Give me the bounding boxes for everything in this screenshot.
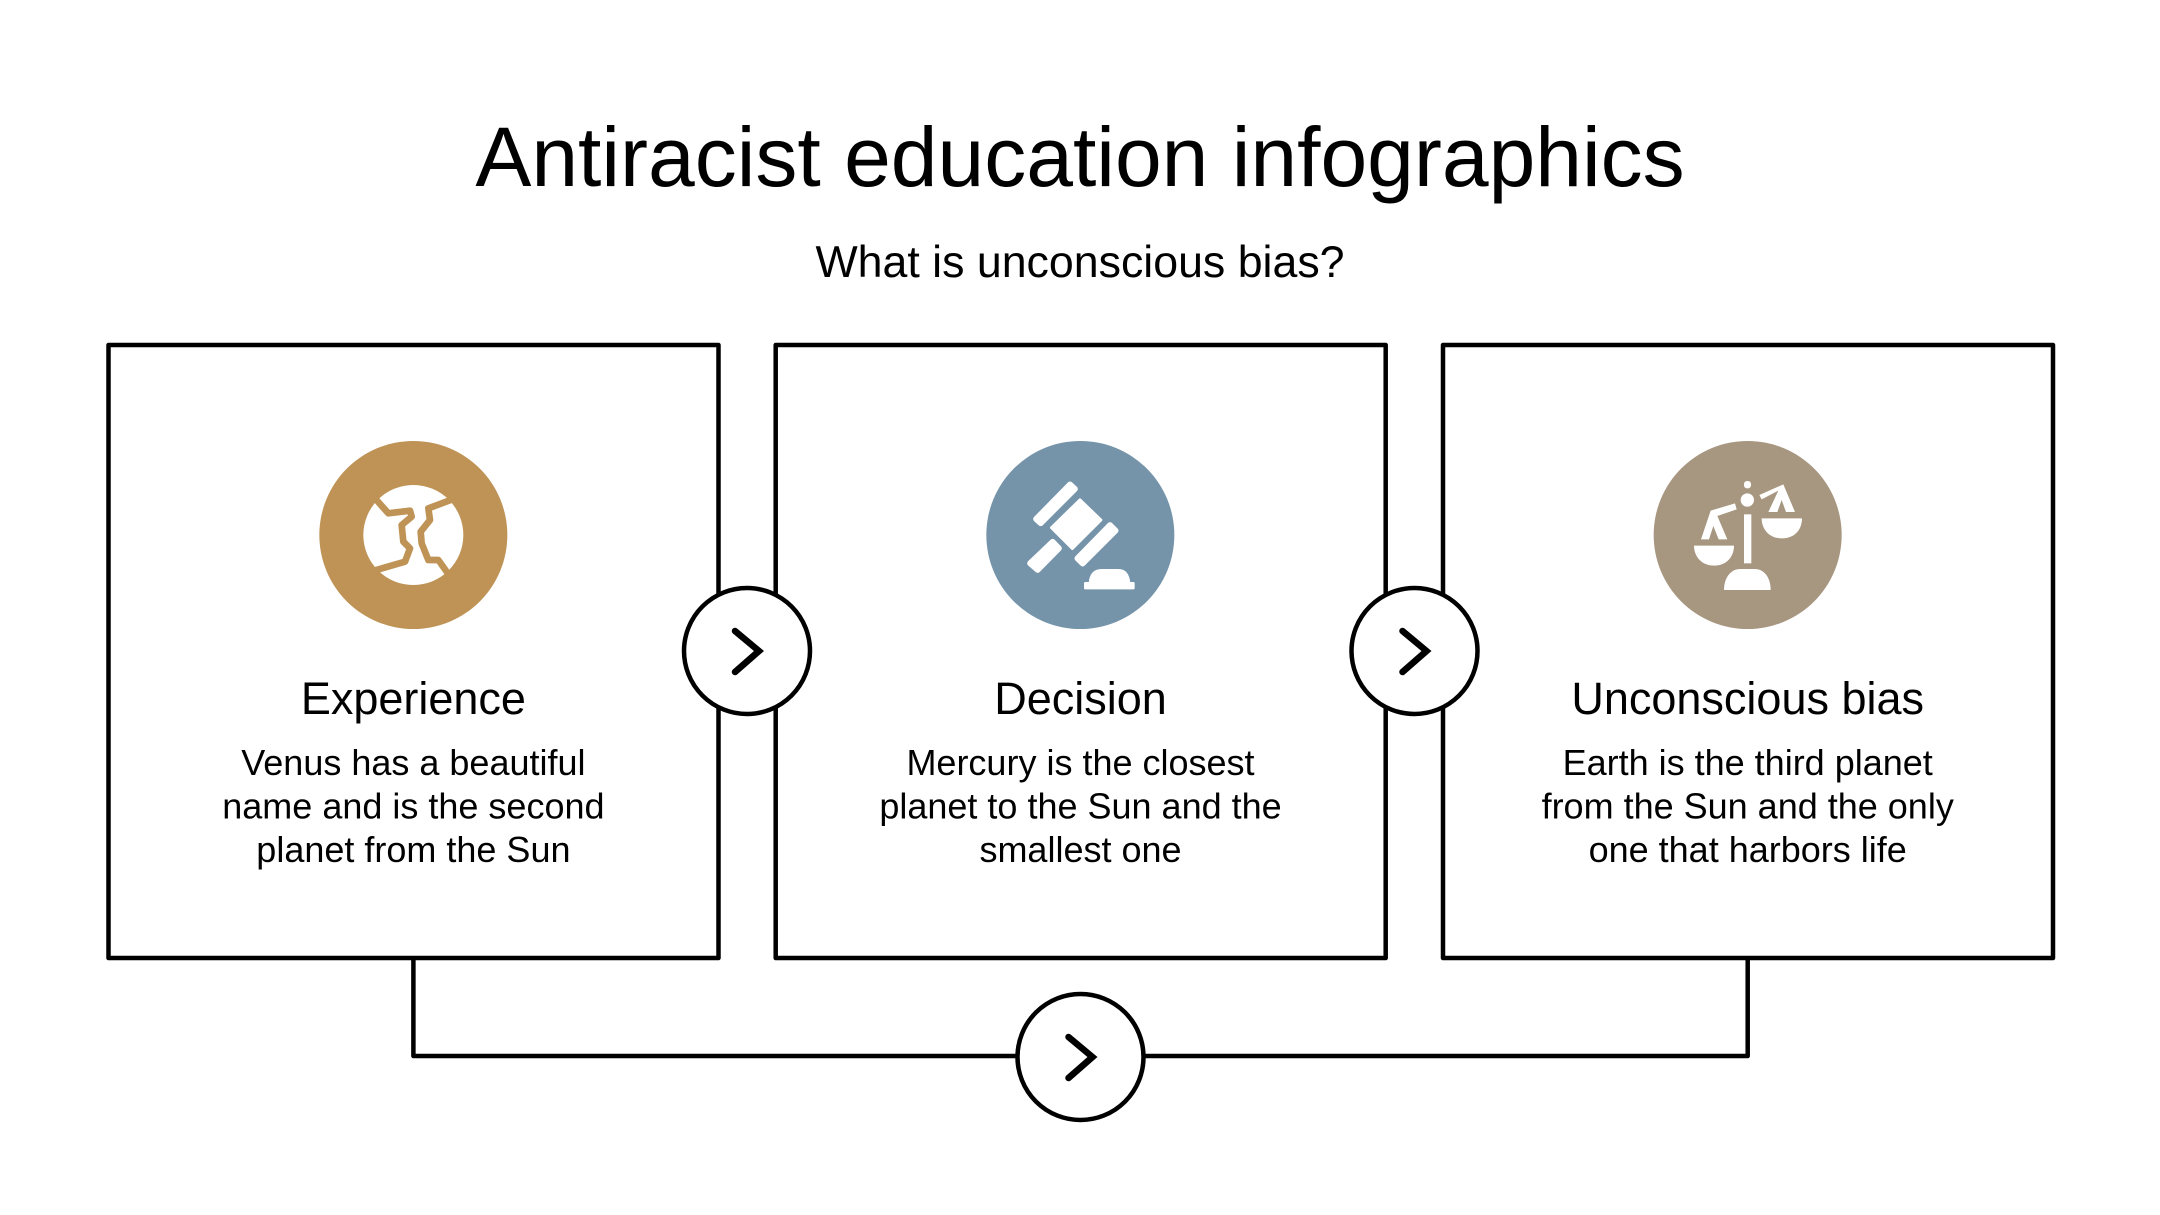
panel: unconscious bias (1443, 345, 2053, 958)
heading: experience: Experience (301, 673, 526, 724)
heading: unconscious bias: Unconscious bias (1571, 673, 1924, 724)
subtitle: What is unconscious bias? (815, 238, 1345, 287)
text: decision description: Mercury is the closest (906, 742, 1255, 783)
title: Antiracist education infographics (475, 110, 1685, 204)
panel: experience (108, 345, 718, 958)
connector line between first and third panels (413, 958, 1748, 1056)
text: unconscious bias description: from the Sun and the only (1542, 786, 1954, 826)
icon: unbalanced scales (1654, 441, 1842, 629)
text: experience description: name and is the second (222, 786, 605, 826)
heading: decision: Decision (994, 673, 1167, 724)
arrow: experience to decision (684, 588, 810, 714)
text: decision description: planet to the Sun and the (879, 786, 1282, 826)
arrow: connector to unconscious bias (1018, 994, 1144, 1120)
text: experience description: Venus has a beautiful (241, 742, 586, 783)
text: experience description: planet from the Sun (256, 829, 571, 870)
text: decision description: smallest one (979, 829, 1182, 870)
icon: cracked earth (319, 441, 507, 629)
icon: gavel (986, 441, 1174, 629)
panel: decision (776, 345, 1386, 958)
arrow: decision to unconscious bias (1352, 588, 1478, 714)
text: unconscious bias description: Earth is the third planet (1563, 742, 1933, 783)
text: unconscious bias description: one that harbors life (1589, 829, 1907, 870)
